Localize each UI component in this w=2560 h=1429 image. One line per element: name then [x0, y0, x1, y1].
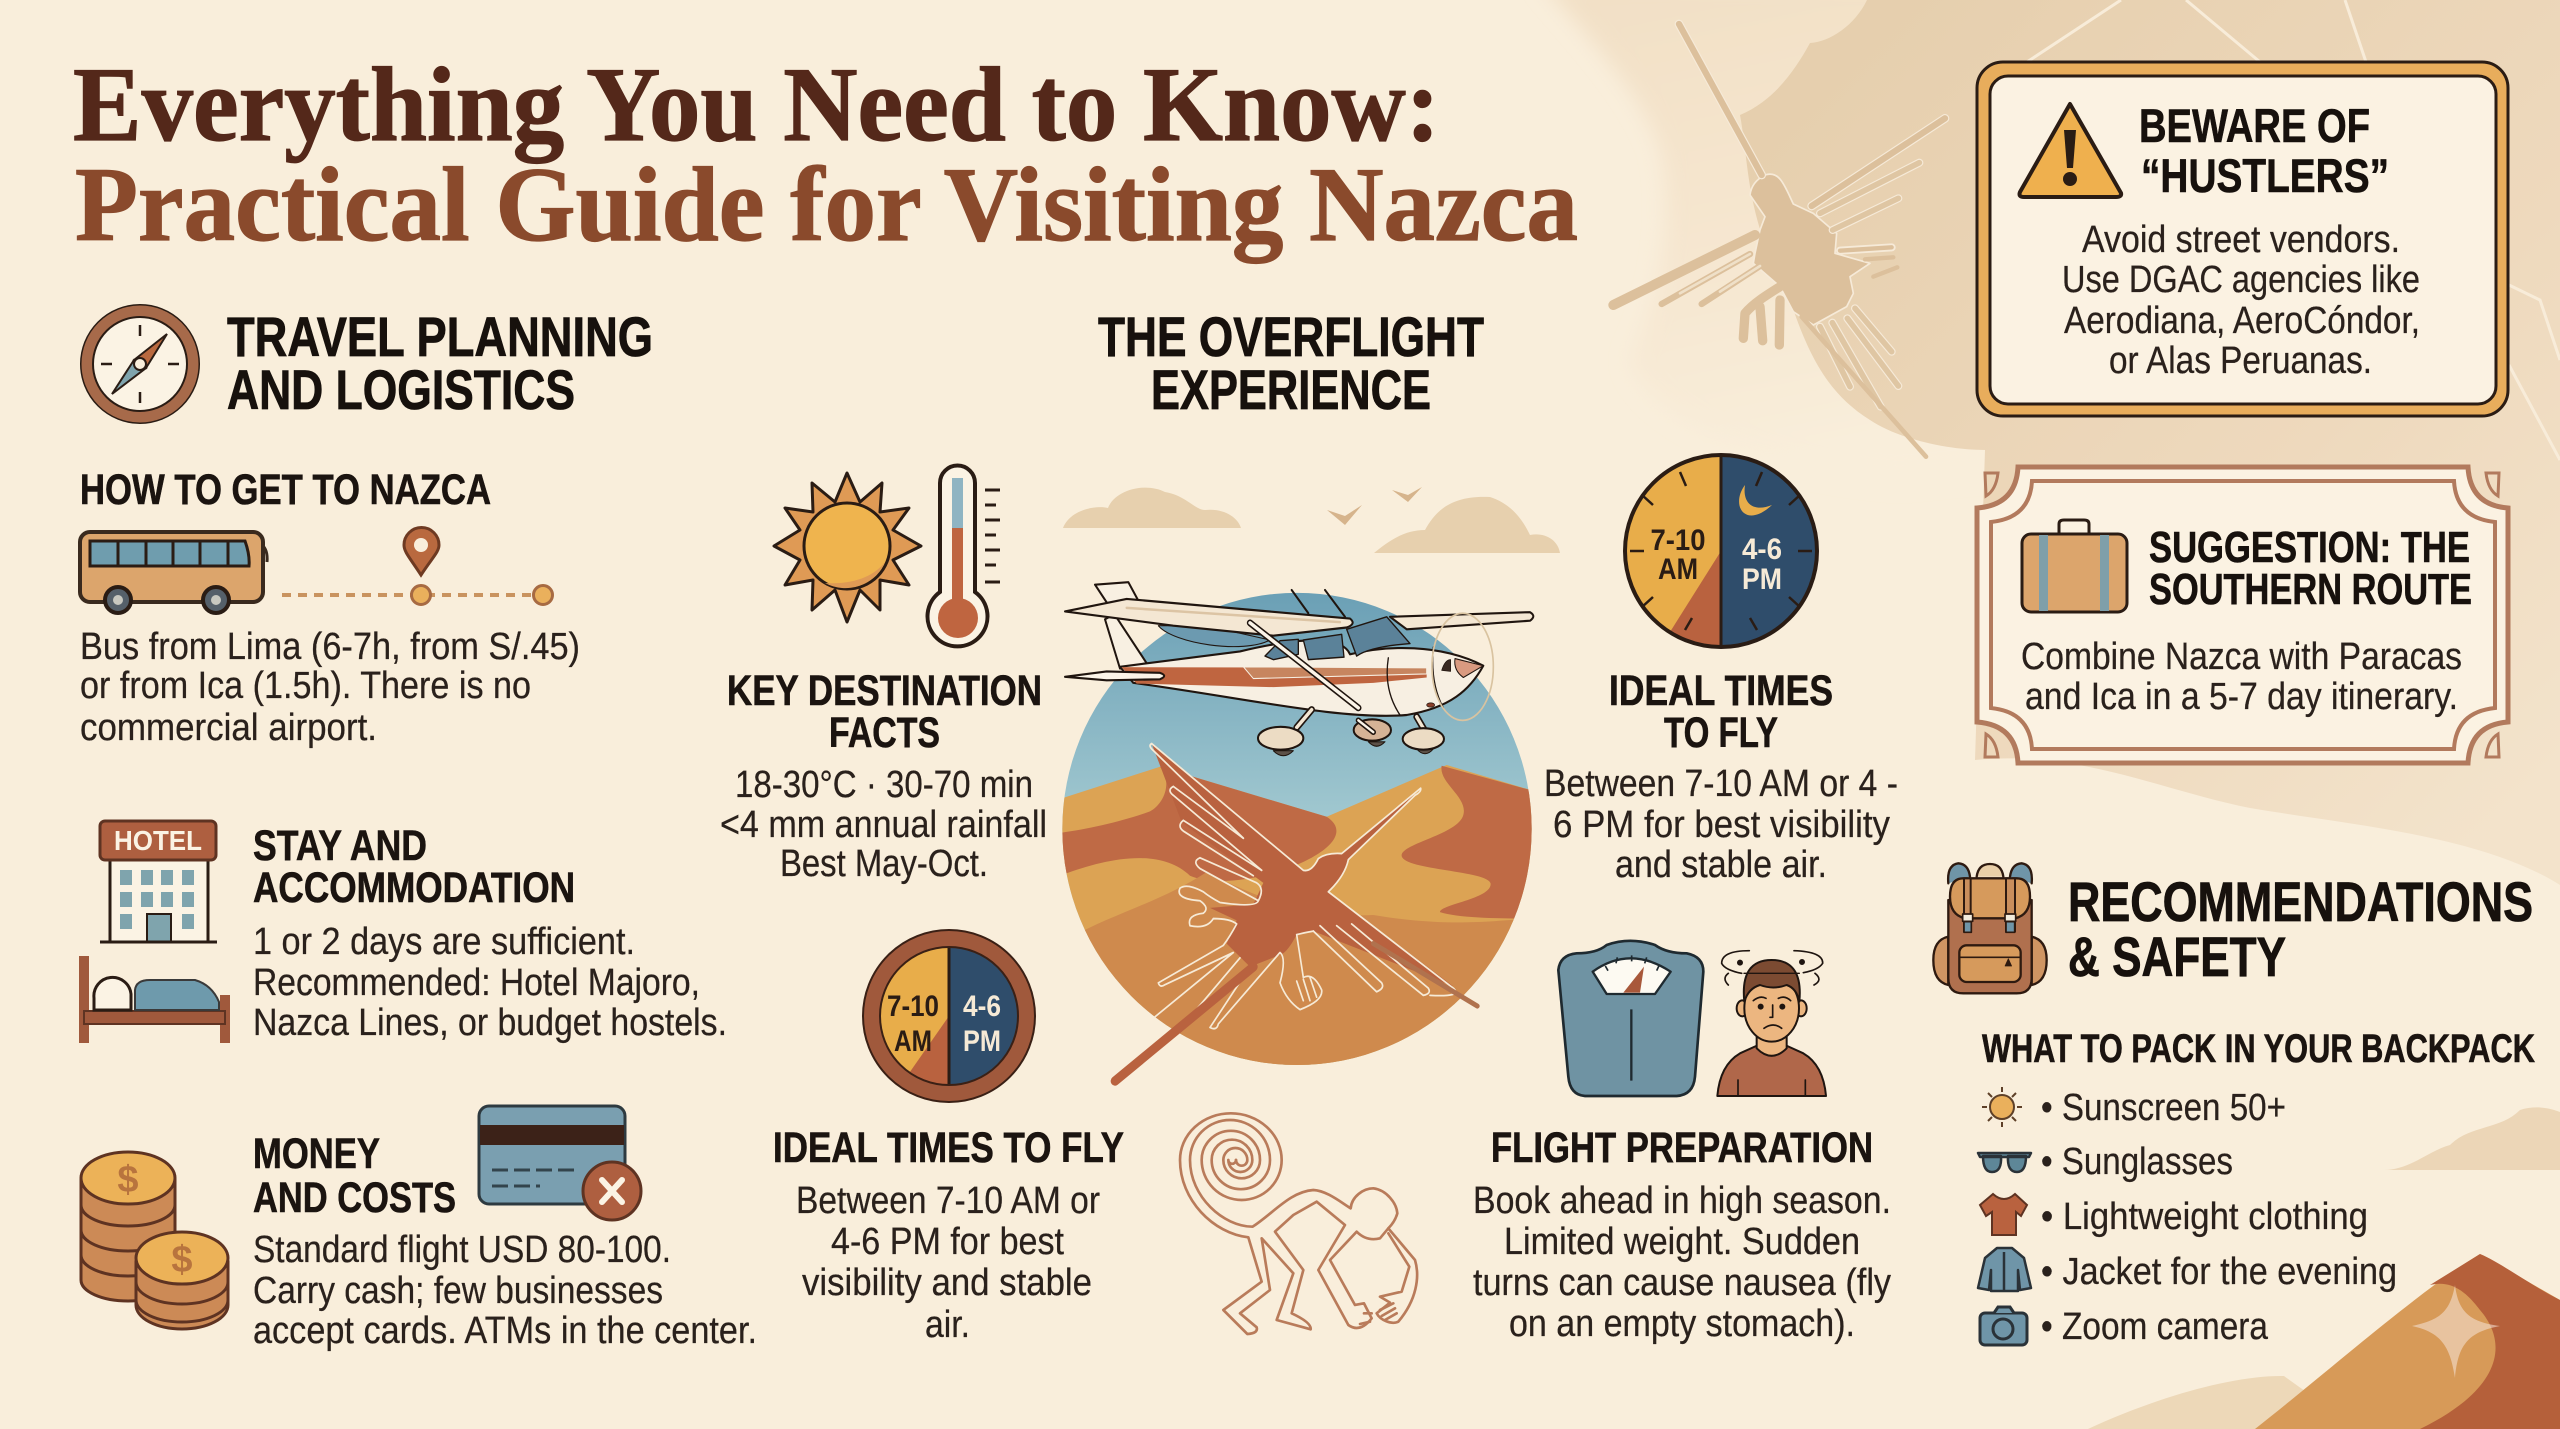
- text: money and costs: Standard flight USD 80-100.: [253, 1229, 671, 1271]
- icon: warning triangle: [2020, 104, 2121, 197]
- pack item: jacket: • Jacket for the evening: [2041, 1251, 2397, 1293]
- icon: suitcase: [2022, 520, 2127, 612]
- background dunes and clouds, bottom right: [2088, 1107, 2560, 1429]
- text: ideal times to fly, lower: visibility and stable: [802, 1262, 1092, 1304]
- text: stay and accommodation: ACCOMMODATION: [253, 864, 575, 912]
- icon: sunglasses: [1978, 1153, 2031, 1172]
- pack item: camera: • Zoom camera: [2041, 1306, 2269, 1348]
- icon: bus: [80, 532, 267, 613]
- heading: beware: [2139, 99, 2389, 202]
- heading: the overflight experience: [1098, 305, 1484, 421]
- icon: luggage scale: [1558, 941, 1703, 1096]
- icon: hotel: [100, 821, 217, 942]
- heading: recommendations: [2068, 870, 2533, 988]
- text: ideal times to fly, right: IDEAL TIMES: [1609, 667, 1833, 715]
- title: [73, 46, 1578, 263]
- icon: sun: [774, 473, 921, 622]
- icon: bed: [84, 956, 225, 1043]
- text: flight preparation: FLIGHT PREPARATION: [1491, 1124, 1873, 1172]
- text: how to get to nazca: [80, 626, 580, 749]
- text: how to get to nazca: Bus from Lima (6-7h, from S/.45): [80, 626, 580, 668]
- text: flight preparation: [1473, 1124, 1891, 1345]
- callout: southern route suggestion: [1977, 467, 2508, 763]
- text: key destination facts: [720, 667, 1047, 885]
- icon: clock with flight times, small: 4-6: [963, 990, 1001, 1023]
- text: stay and accommodation: Nazca Lines, or budget hostels.: [253, 1002, 727, 1044]
- text: key destination facts: FACTS: [829, 709, 940, 757]
- icon: clock with flight times, small: PM: [963, 1025, 1001, 1058]
- text: flight preparation: Limited weight. Sudden: [1504, 1221, 1860, 1263]
- icon: camera: [1980, 1307, 2027, 1345]
- heading: southern route: [2149, 523, 2472, 614]
- text: ideal times to fly, right: TO FLY: [1664, 709, 1778, 757]
- scene disc: sky and dunes: [1060, 590, 1537, 1069]
- text: ideal times to fly, lower: air.: [925, 1304, 970, 1346]
- heading: the overflight experience: THE OVERFLIGHT: [1098, 305, 1484, 368]
- background hummingbird geoglyph: [1613, 24, 1945, 457]
- text: flight preparation: Book ahead in high season.: [1473, 1180, 1891, 1222]
- text: ideal times to fly, right: 6 PM for best visibility: [1553, 804, 1890, 846]
- icon: credit card: [479, 1106, 641, 1220]
- icon: clock with flight times, small: AM: [894, 1025, 932, 1058]
- heading: recommendations: & SAFETY: [2068, 925, 2286, 988]
- heading: beware: “HUSTLERS”: [2141, 149, 2389, 202]
- text: beware: Avoid street vendors.: [2082, 219, 2400, 261]
- icon: sun small: [1982, 1087, 2022, 1127]
- heading: the overflight experience: EXPERIENCE: [1151, 358, 1431, 421]
- icon: nauseous passenger: [1717, 951, 1826, 1096]
- text: ideal times to fly, right: Between 7-10 AM or 4 -: [1544, 763, 1898, 805]
- icon: clock with flight times, large: [1625, 455, 1817, 647]
- text: stay and accommodation: [253, 822, 727, 1044]
- heading: travel planning: TRAVEL PLANNING: [227, 305, 653, 368]
- text: how to get to nazca: commercial airport.: [80, 707, 377, 749]
- icon: clock with flight times, large: AM: [1658, 553, 1698, 586]
- heading: beware: BEWARE OF: [2139, 99, 2370, 152]
- route line with pin: [282, 528, 552, 604]
- icon: clock with flight times, small: [863, 930, 1035, 1102]
- text: ideal times to fly, lower: Between 7-10 AM or: [796, 1180, 1100, 1222]
- icon: compass: [82, 306, 198, 422]
- icon: clock with flight times, small: 7-10: [887, 990, 939, 1023]
- icon: spiral monkey geoglyph: [1180, 1113, 1417, 1334]
- text: money and costs: AND COSTS: [253, 1174, 456, 1222]
- text: money and costs: accept cards. ATMs in the center.: [253, 1310, 757, 1352]
- text: beware: [2062, 219, 2420, 382]
- text: southern route: and Ica in a 5-7 day itinerary.: [2025, 676, 2458, 718]
- text: key destination facts: KEY DESTINATION: [727, 667, 1042, 715]
- text: ideal times to fly, lower: 4-6 PM for best: [831, 1221, 1064, 1263]
- icon: clouds and birds: [1063, 487, 1560, 553]
- heading: southern route: SUGGESTION: THE: [2149, 523, 2470, 572]
- text: beware: Use DGAC agencies like: [2062, 259, 2420, 301]
- text: money and costs: [253, 1130, 757, 1352]
- text: stay and accommodation: Recommended: Hotel Majoro,: [253, 962, 700, 1004]
- heading: travel planning: [227, 305, 653, 421]
- icon: clock with flight times, large: 7-10: [1650, 524, 1706, 557]
- icon: jacket: [1978, 1248, 2031, 1291]
- icon: hotel: HOTEL: [114, 825, 202, 856]
- text: ideal times to fly, lower: IDEAL TIMES TO FLY: [773, 1124, 1124, 1172]
- icon: shirt: [1980, 1194, 2027, 1235]
- text: southern route: [2021, 636, 2462, 718]
- title: Everything You Need to Know:: [73, 46, 1440, 163]
- icon: backpack: [1933, 863, 2047, 993]
- icon: clock with flight times, large: 4-6: [1742, 533, 1782, 566]
- pack item: sunglasses: • Sunglasses: [2041, 1141, 2233, 1183]
- title: Practical Guide for Visiting Nazca: [75, 146, 1578, 263]
- text: flight preparation: turns can cause nausea (fly: [1473, 1262, 1891, 1304]
- text: beware: or Alas Peruanas.: [2109, 340, 2372, 382]
- plane: [1065, 582, 1533, 756]
- icon: coin stacks: [81, 1152, 228, 1329]
- text: stay and accommodation: 1 or 2 days are sufficient.: [253, 921, 635, 963]
- text: stay and accommodation: STAY AND: [253, 822, 427, 870]
- pack item: clothing: • Lightweight clothing: [2041, 1196, 2368, 1238]
- icon: clock with flight times, large: PM: [1742, 563, 1782, 596]
- text: ideal times to fly, lower: [773, 1124, 1124, 1346]
- text: key destination facts: <4 mm annual rainfall: [720, 804, 1047, 846]
- text: money and costs: Carry cash; few businesses: [253, 1270, 663, 1312]
- text: ideal times to fly, right: [1544, 667, 1898, 886]
- heading: travel planning: AND LOGISTICS: [227, 358, 575, 421]
- text: key destination facts: 18-30°C · 30-70 min: [735, 764, 1033, 806]
- icon: coin stacks: $: [171, 1239, 193, 1281]
- text: beware: Aerodiana, AeroCóndor,: [2064, 300, 2420, 342]
- text: southern route: Combine Nazca with Paracas: [2021, 636, 2462, 678]
- panel: recommendations and safety: [1933, 863, 2535, 1348]
- text: key destination facts: Best May-Oct.: [780, 843, 988, 885]
- text: flight preparation: on an empty stomach).: [1509, 1303, 1855, 1345]
- callout: beware of hustlers: [1977, 62, 2508, 416]
- icon: thermometer: [928, 466, 1000, 646]
- nazca hummingbird geoglyph: [1115, 744, 1477, 1081]
- icon: coin stacks: $: [117, 1159, 139, 1201]
- text: how to get to nazca: or from Ica (1.5h). There is no: [80, 665, 531, 707]
- text: money and costs: MONEY: [253, 1130, 380, 1178]
- text: ideal times to fly, right: and stable air.: [1615, 844, 1827, 886]
- heading: southern route: SOUTHERN ROUTE: [2149, 565, 2472, 614]
- pack item: sunscreen: • Sunscreen 50+: [2041, 1087, 2286, 1129]
- panel: travel planning and logistics: [80, 305, 757, 1352]
- illustration: plane over nazca hummingbird: [1060, 582, 1537, 1081]
- subheading: how to get to nazca: HOW TO GET TO NAZCA: [80, 466, 491, 514]
